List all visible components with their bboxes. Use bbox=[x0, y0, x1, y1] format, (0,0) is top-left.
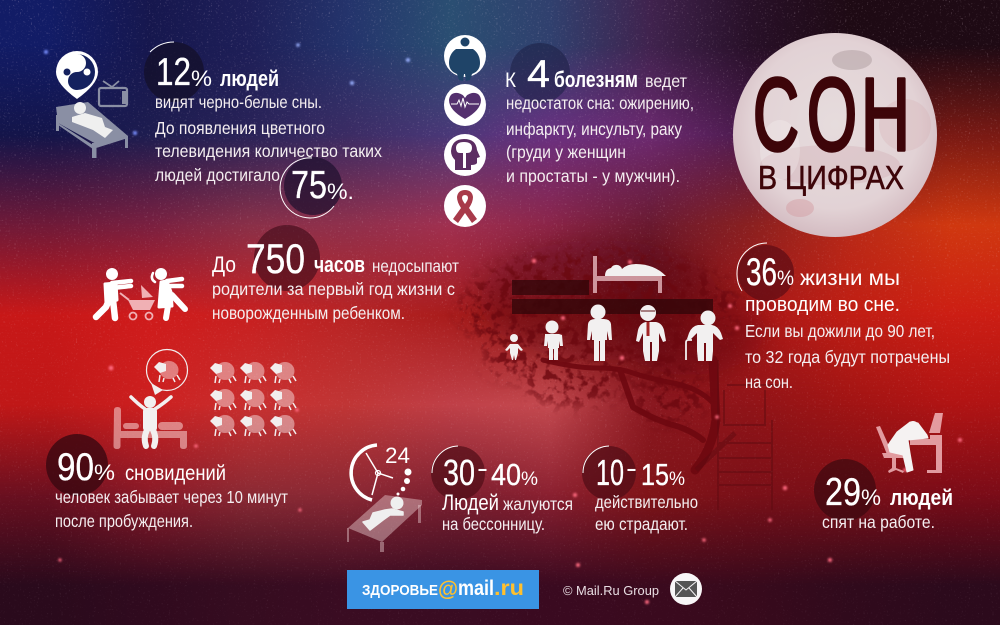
heading: 30-40%: - bbox=[477, 453, 488, 483]
icon: adult with tie bbox=[636, 305, 666, 361]
title: СОН bbox=[753, 57, 910, 172]
text: 90% description: человек забывает через 10 минут bbox=[55, 487, 288, 507]
icon: clock 24 and insomniac bbox=[347, 443, 422, 552]
text: 90% description: после пробуждения. bbox=[55, 511, 193, 531]
number badge 750 bbox=[254, 225, 320, 291]
logo: Здоровье@mail.ru bbox=[347, 570, 539, 609]
heading: до 750 часов недосыпают: До bbox=[212, 252, 236, 277]
heading: 36% жизни мы bbox=[746, 251, 900, 294]
icon: teenager bbox=[587, 304, 612, 361]
text: really suffer bbox=[595, 492, 698, 534]
heading: 90% сновидений: 90 bbox=[57, 446, 94, 489]
logo: Здоровье@mail.ru: ЗДОРОВЬЕ bbox=[362, 582, 438, 599]
text: 750 hours description bbox=[212, 279, 455, 323]
heading: 10-15% bbox=[596, 452, 685, 493]
heading: 90% сновидений: % bbox=[94, 460, 115, 485]
icon: awareness ribbon bbox=[444, 185, 486, 227]
moon with title bbox=[733, 33, 937, 237]
heading: 10-15%: - bbox=[626, 453, 637, 483]
heading: 90% сновидений bbox=[57, 446, 226, 489]
heading: 30-40%: 30 bbox=[443, 452, 475, 493]
icon: heart with pulse bbox=[444, 84, 486, 126]
logo: Здоровье@mail.ru: mail bbox=[458, 577, 494, 600]
icon: yin-yang dream pin, TV and sleeper bbox=[56, 51, 128, 158]
title: СОН: С bbox=[753, 57, 799, 172]
icon: envelope bbox=[670, 573, 702, 605]
text: 36% description bbox=[745, 294, 950, 392]
heading: 36% жизни мы: % bbox=[777, 267, 794, 290]
heading: до 750 часов недосыпают: часов bbox=[314, 252, 365, 277]
text: insomnia complaint bbox=[442, 490, 573, 534]
text: diseases list: инфаркту, инсульту, раку bbox=[506, 119, 682, 139]
title: СОН: О bbox=[807, 57, 857, 172]
icon: nine sheep bbox=[210, 362, 296, 436]
text: 36% description: Если вы дожили до 90 лет, bbox=[745, 321, 935, 341]
icon: baby bbox=[505, 334, 523, 360]
text: 750 hours description: родители за первый год жизни с bbox=[212, 279, 455, 299]
panel: 12% black and white dreams bbox=[56, 42, 382, 218]
text: 12% description bbox=[155, 92, 382, 185]
text: 12% description: телевидения количество таких bbox=[155, 141, 382, 161]
heading: 10-15%: 10 bbox=[596, 452, 624, 493]
heading: 30-40% bbox=[443, 452, 538, 493]
number badge 29% bbox=[814, 459, 876, 521]
text: 12% description: До появления цветного bbox=[155, 118, 325, 138]
heading: 29% людей: людей bbox=[890, 485, 953, 510]
text: 12% description: видят черно-белые сны. bbox=[155, 92, 322, 112]
logo: Здоровье@mail.ru: @ bbox=[438, 578, 458, 601]
icon: sleeping person in bed bbox=[593, 256, 666, 293]
heading: 29% людей: % bbox=[861, 485, 881, 510]
logo: Здоровье@mail.ru: .ru bbox=[494, 577, 524, 600]
bar: bed segment bbox=[512, 280, 589, 295]
heading: 36% жизни мы: жизни мы bbox=[800, 267, 900, 290]
text: insomnia complaint: жалуются bbox=[503, 494, 573, 514]
number badge 10-15 bbox=[582, 446, 636, 500]
text: insomnia complaint: Людей bbox=[442, 490, 499, 515]
text: 90% description bbox=[55, 487, 288, 531]
tree silhouette bbox=[460, 240, 785, 510]
text: diseases list: недостаток сна: ожирению, bbox=[506, 93, 694, 113]
heading: к 4 болезням ведет: болезням bbox=[554, 67, 638, 92]
heading: к 4 болезням ведет: ведет bbox=[645, 71, 687, 91]
title: СОН: Н bbox=[861, 57, 910, 172]
heading: 10-15%: 15 bbox=[641, 457, 669, 492]
heading: 29% людей: 29 bbox=[825, 471, 861, 514]
panel: 36% of life bbox=[737, 243, 950, 392]
number badge 36% bbox=[737, 243, 794, 301]
icon: zombie parents with pram bbox=[96, 268, 185, 320]
icon: brain in head bbox=[444, 134, 486, 176]
icon: obesity bbox=[444, 35, 486, 81]
icon: clock 24 and insomniac: 24 bbox=[385, 443, 410, 468]
panel: 4 diseases bbox=[444, 35, 694, 227]
heading: до 750 часов недосыпают: 750 bbox=[246, 235, 305, 282]
heading 12% людей: людей bbox=[220, 66, 279, 91]
heading: 10-15%: % bbox=[669, 469, 685, 490]
number badge 12% bbox=[144, 42, 204, 102]
icon: elder with cane bbox=[686, 310, 723, 361]
number badge 75%: 75 bbox=[291, 164, 327, 207]
number badge 75% bbox=[280, 157, 354, 218]
heading: до 750 часов недосыпают: недосыпают bbox=[372, 256, 459, 276]
chart: share of life asleep with bars and ages bbox=[505, 256, 723, 361]
subtitle: в цифрах: В ЦИФРАХ bbox=[758, 159, 904, 196]
panel: 750 hours bbox=[96, 225, 459, 323]
text: diseases list: (груди у женщин bbox=[506, 142, 626, 162]
panel: 90% of dreams bbox=[46, 350, 296, 531]
icon: person asleep at desk bbox=[876, 413, 943, 473]
text: diseases list bbox=[506, 93, 694, 186]
heading: 90% сновидений: сновидений bbox=[125, 462, 226, 485]
text: 36% description: на сон. bbox=[745, 372, 793, 392]
number badge 30-40 bbox=[431, 446, 485, 500]
number badge 4 bbox=[510, 43, 570, 103]
text: really suffer: ею страдают. bbox=[595, 514, 688, 534]
text: really suffer: действительно bbox=[595, 492, 698, 512]
panel: 29% sleep at work bbox=[814, 413, 953, 532]
text: 36% description: то 32 года будут потрачены bbox=[745, 347, 950, 367]
text: diseases list: и простаты - у мужчин). bbox=[506, 166, 680, 186]
heading: к 4 болезням ведет: К bbox=[505, 69, 517, 92]
text: 36% description: проводим во сне. bbox=[745, 294, 900, 316]
bar: full lifetime bbox=[512, 299, 713, 314]
heading: 36% жизни мы: 36 bbox=[746, 251, 777, 294]
text: insomnia complaint: на бессонницу. bbox=[442, 514, 545, 534]
heading: 30-40%: 40 bbox=[491, 457, 521, 492]
heading 12% людей: 12 bbox=[156, 51, 191, 94]
heading: к 4 болезням ведет bbox=[505, 53, 687, 96]
icon: waking person, thought sheep bbox=[114, 350, 188, 449]
heading: к 4 болезням ведет: 4 bbox=[527, 53, 550, 96]
icon: child bbox=[544, 320, 563, 360]
panel: insomnia bbox=[347, 443, 698, 552]
number badge 90% bbox=[46, 434, 108, 496]
heading: 29% людей bbox=[825, 471, 953, 514]
heading: 30-40%: % bbox=[521, 469, 538, 490]
heading 12% людей: % bbox=[191, 66, 212, 91]
text: sleep at work: спят на работе. bbox=[822, 512, 935, 532]
text: 750 hours description: новорожденным ребенком. bbox=[212, 303, 405, 323]
text: 12% description: людей достигало bbox=[155, 165, 280, 185]
number badge 75%: %. bbox=[327, 179, 354, 204]
heading: до 750 часов недосыпают bbox=[212, 235, 459, 282]
copyright: © Mail.Ru Group bbox=[563, 583, 659, 598]
heading 12% людей bbox=[156, 51, 279, 94]
